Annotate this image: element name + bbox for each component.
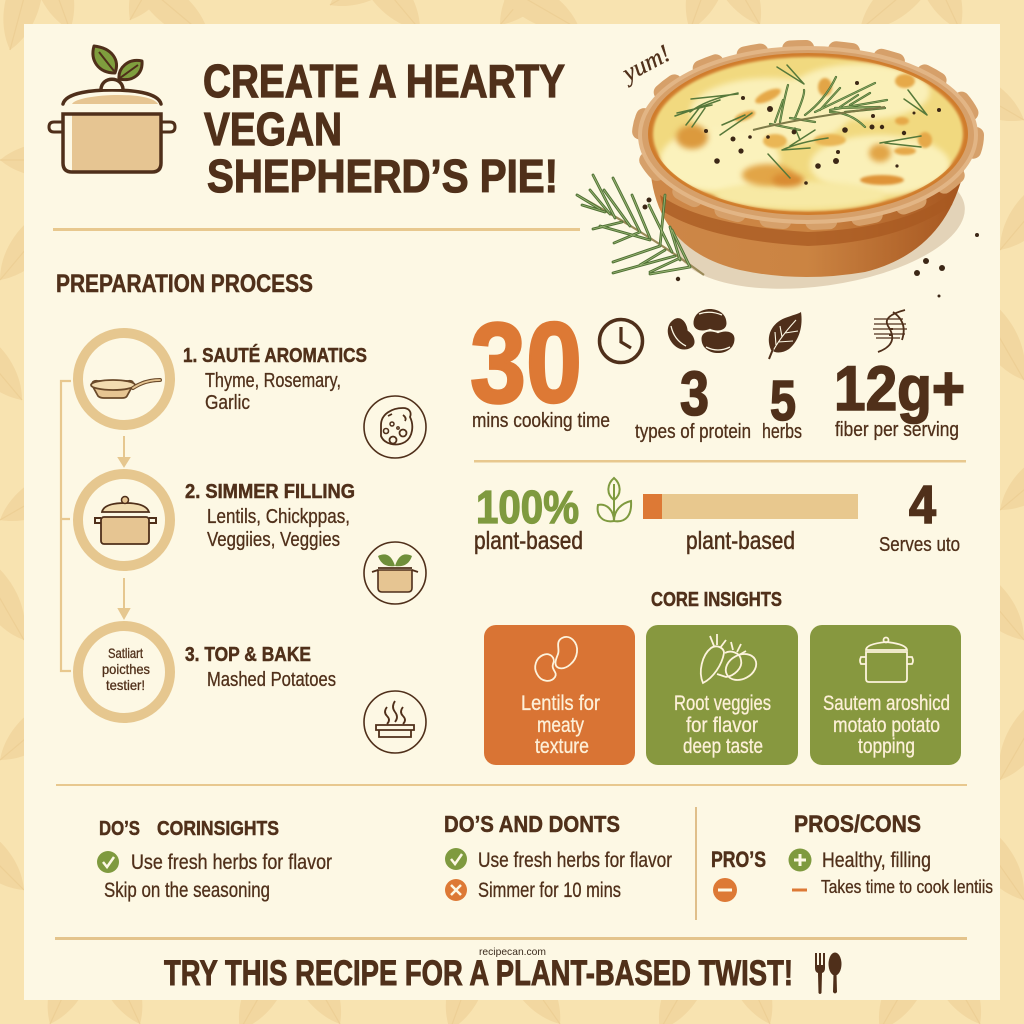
- icon: hot baking dish: [364, 691, 426, 753]
- stat: 100% plant-based: plant-based: [474, 527, 583, 555]
- panel: pros and cons: [711, 811, 993, 902]
- step 2 circle: pot: [78, 474, 170, 566]
- step 1 text: Garlic: [205, 392, 250, 414]
- icon: pot with leaves: [364, 542, 426, 604]
- stat: 12g+ fiber per serving: fiber per serving: [835, 419, 959, 441]
- handwritten yum!: yum!: [615, 40, 675, 89]
- icon: three beans: [662, 309, 734, 355]
- card: root veggies: Root veggies: [674, 692, 771, 715]
- stat: serves 4: [879, 475, 960, 556]
- bar label: plant-based: plant-based: [686, 527, 795, 555]
- step 1 text: [183, 344, 367, 414]
- icon: sprout: [598, 478, 631, 522]
- title: [203, 55, 565, 202]
- icon: fork and spoon: [815, 952, 842, 994]
- heading: core insights: CORE INSIGHTS: [651, 589, 782, 611]
- stat: 100% plant-based: [474, 481, 583, 555]
- panel: do's and donts: [444, 811, 672, 902]
- panel: do's and donts: Simmer for 10 mins: [478, 879, 621, 902]
- panel: pros and cons: Healthy, filling: [822, 849, 931, 872]
- arrow: step 2 to step 3: [119, 578, 129, 618]
- step 1 circle: frying pan: [78, 333, 170, 425]
- card: lentils: Lentils for: [521, 692, 600, 715]
- progress bar: [643, 494, 858, 519]
- card: lentils: meaty: [537, 714, 584, 737]
- icon: herb leaf: [769, 312, 802, 359]
- panel: pros and cons: PRO’S: [711, 847, 766, 872]
- card: root veggies: [646, 625, 798, 765]
- card: root veggies: for flavor: [686, 714, 758, 737]
- card: potato topping: Sautem aroshicd: [823, 692, 950, 715]
- step 3 text: Mashed Potatoes: [207, 669, 336, 691]
- stat: 3 types of protein: types of protein: [635, 421, 751, 443]
- card: potato topping: topping: [858, 735, 915, 758]
- process bracket connector: [61, 381, 71, 671]
- heading: preparation process: PREPARATION PROCESS: [56, 270, 313, 298]
- title: VEGAN: [204, 103, 342, 155]
- panel: do's and donts: Use fresh herbs for flavor: [478, 849, 672, 872]
- filling blotches: [660, 64, 950, 209]
- stat: serves 4: Serves uto: [879, 534, 960, 556]
- stat: 3 types of protein: [635, 360, 751, 443]
- header divider: [53, 228, 580, 231]
- step 2 text: [185, 481, 355, 551]
- icon: clock: [600, 320, 642, 362]
- vertical divider: [695, 807, 697, 920]
- panel: pros and cons: Takes time to cook lentiis: [821, 877, 993, 897]
- stat: 100% plant-based: 100%: [476, 481, 579, 533]
- title: CREATE A HEARTY: [203, 55, 565, 107]
- stat: 5 herbs: 5: [770, 369, 796, 433]
- icon: seasoned lentil patty: [364, 396, 426, 458]
- footer divider: [55, 937, 967, 940]
- step 1 text: Thyme, Rosemary,: [205, 370, 341, 392]
- stats divider: [474, 460, 966, 462]
- card: potato topping: motato potato: [833, 714, 940, 737]
- stat: serves 4: 4: [909, 475, 936, 535]
- stat: 12g+ fiber per serving: 12g+: [834, 354, 965, 424]
- stat: 5 herbs: [762, 369, 802, 443]
- step 1 text: 1. SAUTÉ AROMATICS: [183, 344, 367, 367]
- card: root veggies: deep taste: [683, 735, 763, 758]
- panel: do's core insights: CORINSIGHTS: [157, 818, 279, 840]
- step 3 circle: caption: poicthes: [102, 661, 150, 677]
- illustration: baked shepherd's pie: [577, 48, 979, 306]
- step 2 text: 2. SIMMER FILLING: [185, 481, 355, 503]
- step 3 circle: caption: testier!: [106, 677, 145, 693]
- step 2 text: Lentils, Chickppas,: [207, 506, 350, 528]
- panel: do's core insights: DO’S: [99, 818, 140, 840]
- panel: do's core insights: [97, 818, 332, 902]
- step 2 text: Veggiies, Veggies: [207, 529, 340, 551]
- panel: do's core insights: Skip on the seasoning: [104, 879, 270, 902]
- icon: pot with sprouting leaves: [49, 46, 175, 172]
- step 3 circle: caption: Satliart: [108, 645, 143, 661]
- stat: 3 types of protein: 3: [680, 360, 709, 429]
- arrow: step 1 to step 2: [119, 436, 129, 466]
- panel: pros and cons: PROS/CONS: [794, 811, 921, 838]
- section divider: [56, 784, 967, 786]
- card: potato topping: [810, 625, 961, 765]
- panel: do's and donts: DO’S AND DONTS: [444, 811, 620, 837]
- call to action: TRY THIS RECIPE FOR A PLANT-BASED TWIST!: [164, 954, 793, 993]
- stat: 30 mins cooking time: 30: [470, 300, 582, 427]
- panel: do's core insights: Use fresh herbs for flavor: [131, 851, 332, 874]
- stat: 30 mins cooking time: mins cooking time: [472, 410, 610, 432]
- card: lentils: texture: [535, 735, 589, 758]
- step 3 text: [185, 644, 336, 691]
- step 3 text: 3. TOP & BAKE: [185, 644, 311, 666]
- icon: fiber strands: [873, 310, 907, 352]
- card: lentils: [484, 625, 635, 765]
- title: SHEPHERD’S PIE!: [207, 150, 558, 202]
- source credit: recipecan.com: [479, 946, 546, 958]
- step 3 circle: caption: [78, 626, 170, 718]
- stat: 5 herbs: herbs: [762, 421, 802, 443]
